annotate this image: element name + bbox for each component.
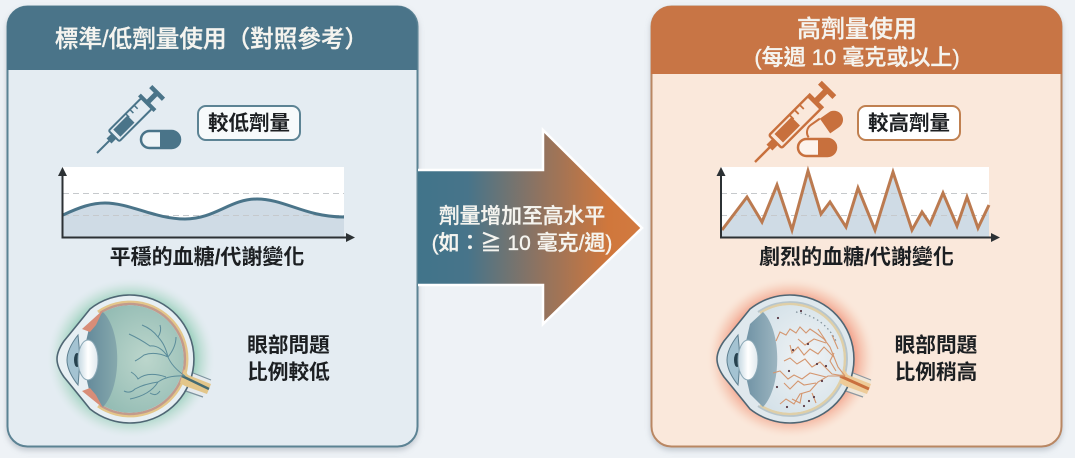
icon: syringe low dose <box>89 85 165 161</box>
arrow text: 劑量增加至高水平 <box>439 205 605 228</box>
label: higher dose: 較高劑量 <box>868 111 950 135</box>
label: lower dose <box>198 106 300 140</box>
label: lower dose: 較低劑量 <box>208 111 290 135</box>
text: lower eye problem rate <box>247 334 330 384</box>
heading: high dose: (每週 10 毫克或以上) <box>754 45 960 70</box>
panel header: high dose <box>651 6 1062 74</box>
line chart: stable glucose <box>58 167 355 242</box>
arrow text <box>432 205 612 255</box>
icon: capsules high dose <box>798 107 847 156</box>
text: lower eye problem rate: 比例較低 <box>247 360 330 384</box>
panel: standard/low dose <box>7 6 418 446</box>
text: lower eye problem rate: 眼部問題 <box>247 334 330 357</box>
caption: stable: 平穩的血糖/代謝變化 <box>110 245 304 269</box>
icon: syringe high dose <box>748 83 834 169</box>
text: higher eye problem rate: 眼部問題 <box>895 334 978 357</box>
text: higher eye problem rate: 比例稍高 <box>895 360 977 384</box>
label: higher dose <box>858 106 960 140</box>
heading: high dose <box>754 16 960 70</box>
icon: damaged eye <box>706 277 876 439</box>
heading: high dose: 高劑量使用 <box>797 16 917 43</box>
caption: volatile: 劇烈的血糖/代謝變化 <box>759 245 954 269</box>
panel: high dose <box>651 6 1062 446</box>
icon: capsule low dose <box>141 131 180 148</box>
text: higher eye problem rate <box>895 334 978 384</box>
arrow text: (如：≧ 10 毫克/週) <box>432 232 612 255</box>
heading: low dose: 標準/低劑量使用（對照參考） <box>55 26 368 53</box>
line chart: volatile glucose <box>716 167 1000 242</box>
panel header: low dose <box>7 6 418 70</box>
icon: healthy eye <box>46 277 216 439</box>
arrow: dose increase <box>418 130 642 324</box>
